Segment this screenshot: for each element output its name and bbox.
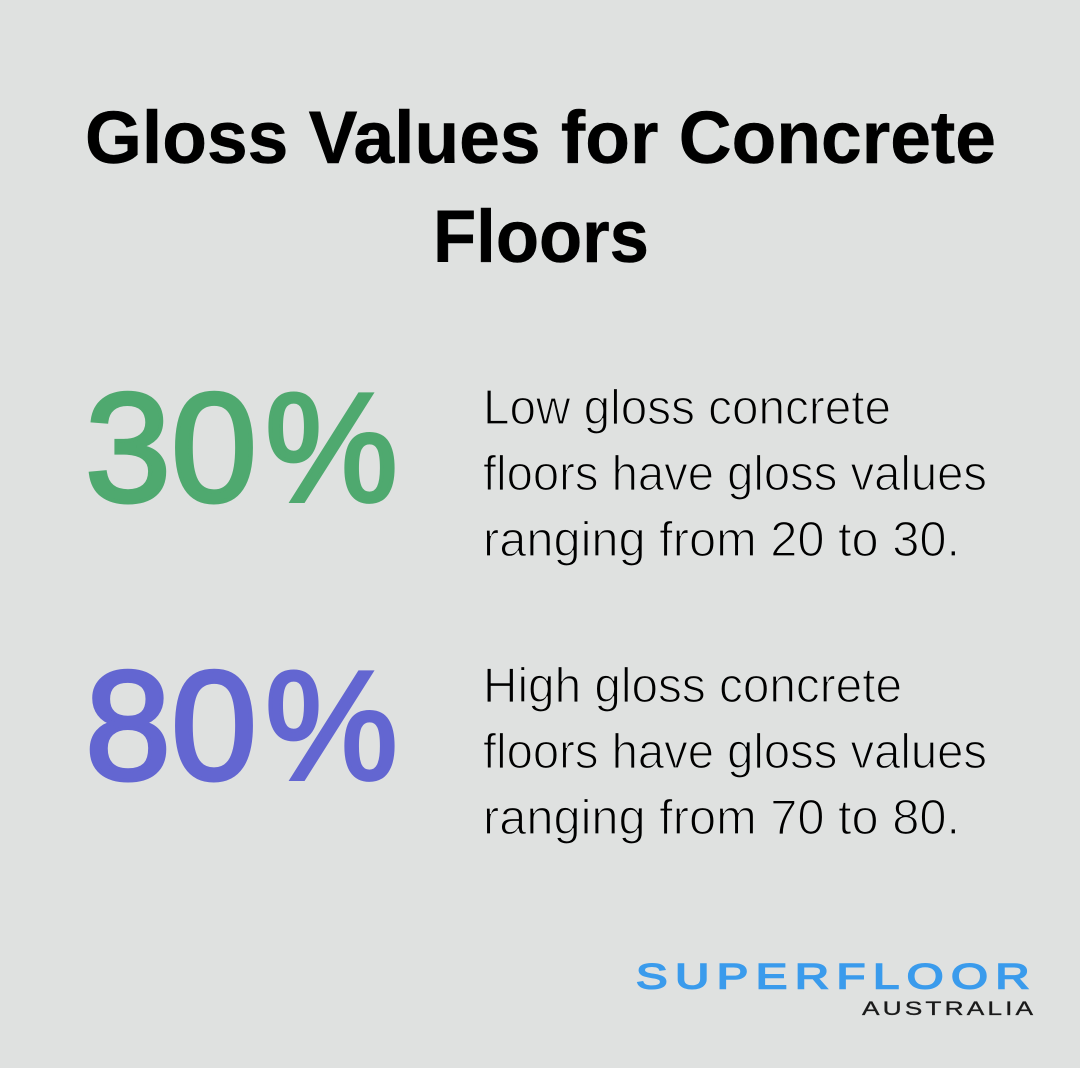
stat number: 30%: % xyxy=(265,361,398,534)
text block: high gloss description: floors have gloss values xyxy=(483,725,987,779)
logo: Superfloor Australia: AUSTRALIA xyxy=(862,997,1036,1019)
text block: low gloss description xyxy=(483,381,987,567)
stat number: 30%: 30 xyxy=(85,361,257,534)
stat number: 80%: % xyxy=(265,639,398,812)
title: Floors xyxy=(433,195,649,278)
stat number: 30% xyxy=(85,361,398,534)
title: Gloss Values for Concrete xyxy=(85,96,996,179)
text block: low gloss description: floors have gloss values xyxy=(483,447,987,501)
stat: 30% low gloss xyxy=(85,361,987,567)
text block: high gloss description: High gloss concrete xyxy=(483,659,902,713)
text block: low gloss description: Low gloss concrete xyxy=(483,381,891,435)
title xyxy=(85,96,996,278)
stat number: 80% xyxy=(85,639,398,812)
text block: high gloss description: ranging from 70 to 80. xyxy=(483,791,960,845)
text block: low gloss description: ranging from 20 to 30. xyxy=(483,513,960,567)
logo: Superfloor Australia: SUPERFLOOR xyxy=(636,957,1037,996)
stat number: 80%: 80 xyxy=(85,639,257,812)
text block: high gloss description xyxy=(483,659,987,845)
stat: 80% high gloss xyxy=(85,639,987,845)
logo: Superfloor Australia xyxy=(636,957,1037,1019)
